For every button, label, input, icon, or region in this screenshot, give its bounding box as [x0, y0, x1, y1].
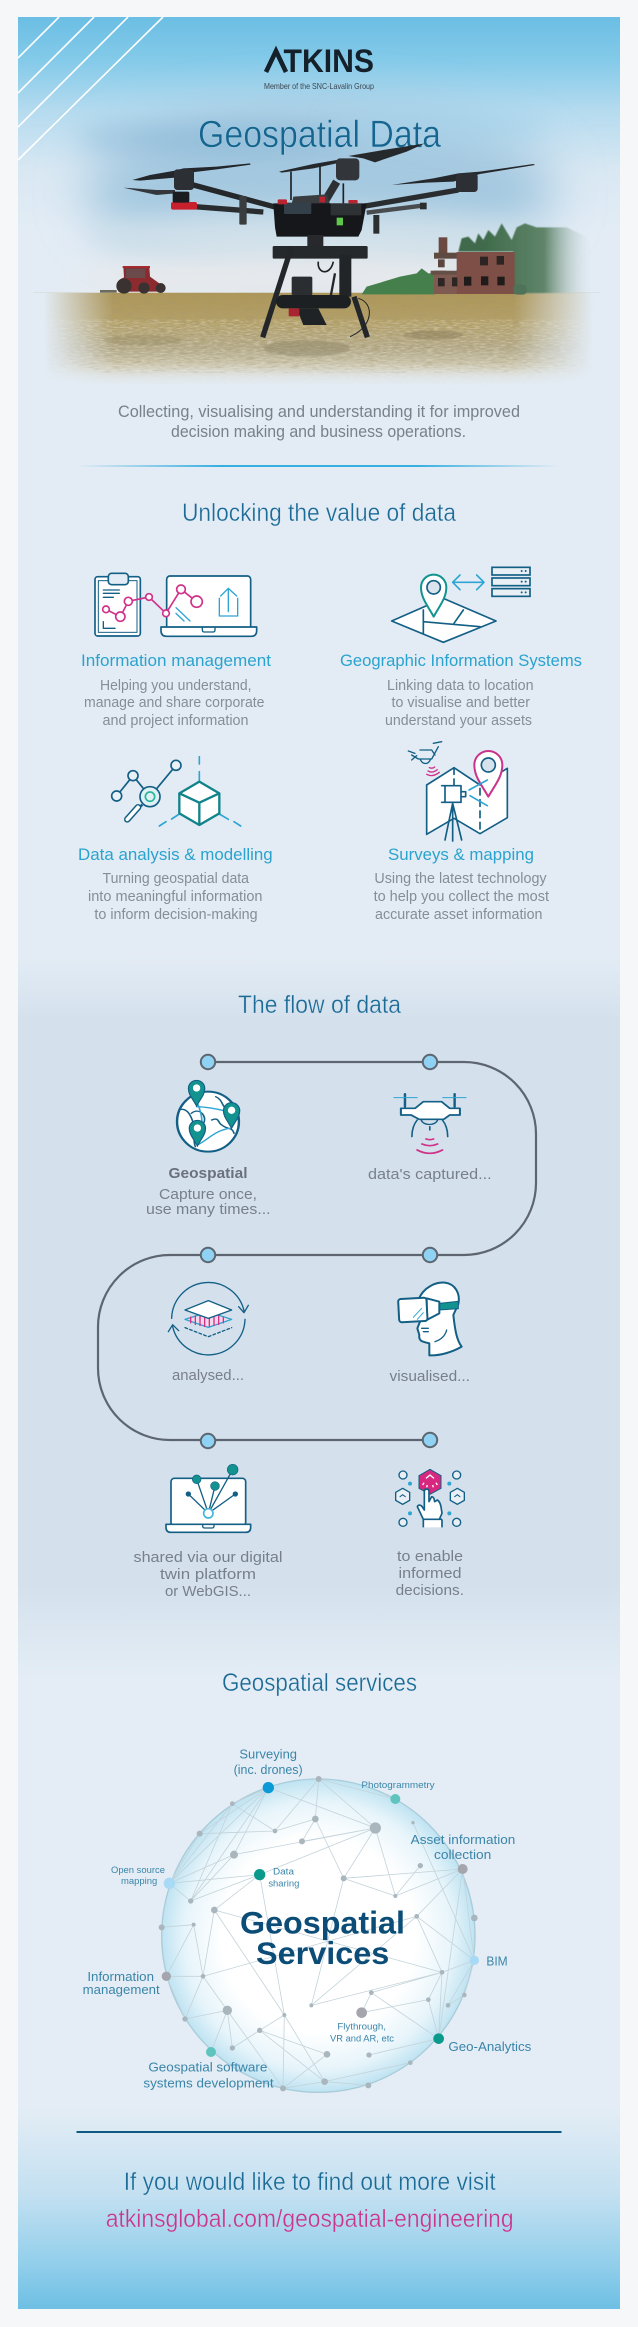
- trees: [458, 223, 597, 293]
- sphere labels: Photogrammetry: [361, 1780, 435, 1790]
- text block: geographic information systems: to visualise and better: [392, 695, 530, 711]
- text block: geographic information systems: understand your assets: [385, 713, 532, 729]
- text block: information management: Helping you understand,: [100, 678, 252, 694]
- text block: shared via digital twin: or WebGIS...: [165, 1584, 251, 1600]
- call to action: atkinsglobal.com/geospatial-engineering: [106, 2205, 514, 2233]
- text block: geospatial capture once: Capture once,: [159, 1187, 257, 1203]
- text block: surveys and mapping: Surveys & mapping: [388, 846, 534, 864]
- text block: information management: manage and share corporate: [84, 695, 264, 711]
- network nodes: [159, 1776, 478, 2091]
- sphere labels: management: [83, 1983, 160, 1997]
- icon: map pin and server: [392, 567, 530, 642]
- text: visualised: visualised...: [390, 1369, 470, 1385]
- hero sky clouds: [70, 105, 570, 304]
- sphere labels: mapping: [121, 1876, 157, 1886]
- ruined building: [431, 237, 527, 295]
- sphere labels: Surveying: [239, 1747, 297, 1761]
- call to action: [106, 2168, 514, 2233]
- text block: information management: and project information: [102, 713, 248, 729]
- sphere labels: sharing: [268, 1879, 299, 1889]
- text block: surveys and mapping: Using the latest technology: [374, 871, 547, 887]
- text block: geospatial capture once: [146, 1165, 271, 1218]
- flow path: [98, 1062, 536, 1440]
- sphere labels: Flythrough,: [337, 2021, 386, 2031]
- icon: surveys and mapping: [408, 742, 507, 841]
- field: [33, 292, 600, 381]
- drone: [123, 143, 535, 337]
- icon: VR headset head: [398, 1283, 462, 1355]
- tractor: [100, 266, 166, 294]
- sphere labels: [83, 1747, 531, 2091]
- call to action: If you would like to find out more visit: [124, 2168, 496, 2196]
- icon: laptop network: [166, 1464, 251, 1532]
- text block: geospatial capture once: Geospatial: [168, 1165, 248, 1182]
- sphere labels: Geospatial software: [148, 2061, 267, 2075]
- intro text: decision making and business operations.: [171, 423, 466, 441]
- sphere labels: Data: [273, 1867, 294, 1877]
- text block: shared via digital twin: twin platform: [160, 1567, 256, 1583]
- section: unlocking the value of data: [78, 499, 582, 923]
- hero photo: drone in field: [30, 143, 603, 393]
- sphere labels: Information: [87, 1970, 154, 1984]
- struts: [291, 166, 343, 203]
- body: [292, 194, 330, 204]
- icon: analysis cycle: [168, 1282, 248, 1355]
- text: data's captured: data's captured...: [368, 1167, 492, 1183]
- camera: [292, 277, 312, 295]
- section: geospatial services: [83, 1669, 531, 2092]
- intro text: Collecting, visualising and understanding it for improved: [118, 403, 520, 421]
- sphere labels: collection: [434, 1848, 491, 1862]
- text: analysed: analysed...: [172, 1368, 244, 1384]
- logo: Atkins: Member of the SNC-Lavalin Group: [264, 81, 374, 91]
- gimbal & bar: [307, 235, 323, 248]
- text block: data analysis and modelling: to inform decision-making: [94, 907, 258, 923]
- icon: survey drone: [394, 1094, 466, 1153]
- text block: to enable informed decisions: [396, 1549, 464, 1599]
- icon: data analysis and cube: [112, 757, 241, 826]
- text block: geospatial capture once: use many times...: [146, 1202, 271, 1218]
- heading: Unlocking the value of data: [182, 499, 456, 527]
- highlighted nodes: [162, 1782, 479, 2057]
- sphere labels: Open source: [111, 1865, 165, 1875]
- sphere labels: systems development: [143, 2077, 274, 2091]
- flow nodes: [201, 1055, 437, 1448]
- text block: shared via digital twin: shared via our digital: [134, 1550, 282, 1566]
- heading: The flow of data: [238, 991, 401, 1019]
- arms: [193, 185, 280, 208]
- text block: surveys and mapping: [374, 846, 549, 923]
- bushes: [362, 268, 435, 294]
- sphere labels: Asset information: [411, 1833, 515, 1847]
- section: the flow of data: [98, 991, 536, 1600]
- text block: data analysis and modelling: Turning geospatial data: [102, 871, 250, 887]
- sphere labels: Geo-Analytics: [448, 2040, 531, 2054]
- sphere title: [240, 1905, 405, 1971]
- text block: to enable informed decisions: to enable: [397, 1549, 463, 1565]
- intro text: [118, 403, 520, 441]
- landing legs: [263, 247, 292, 337]
- icon: hand pressing hexagon: [396, 1469, 464, 1527]
- sphere network diagram: [83, 1747, 531, 2092]
- icon: globe with pins: [177, 1080, 240, 1152]
- text block: surveys and mapping: to help you collect the most: [374, 889, 549, 905]
- text block: information management: Information management: [81, 652, 271, 670]
- text block: data analysis and modelling: Data analysis & modelling: [78, 846, 273, 864]
- sphere labels: VR and AR, etc: [330, 2034, 395, 2044]
- sphere labels: (inc. drones): [234, 1763, 303, 1777]
- corner stripes: [18, 17, 163, 160]
- text block: geographic information systems: Linking data to location: [387, 678, 534, 694]
- text block: shared via digital twin: [134, 1550, 282, 1600]
- sphere title: Services: [256, 1936, 389, 1971]
- text block: to enable informed decisions: informed: [398, 1566, 462, 1582]
- text block: data analysis and modelling: [78, 846, 273, 923]
- icon: clipboard and laptop: [95, 573, 257, 636]
- text block: surveys and mapping: accurate asset information: [375, 907, 542, 923]
- sphere title: Geospatial: [240, 1905, 405, 1940]
- text block: information management: [81, 652, 271, 729]
- propellers: [132, 163, 251, 181]
- sphere labels: BIM: [486, 1954, 508, 1968]
- title: Geospatial Data: [198, 114, 442, 156]
- text block: geographic information systems: [340, 652, 582, 729]
- heading: Geospatial services: [222, 1669, 417, 1697]
- text block: geographic information systems: Geographic Information Systems: [340, 652, 582, 670]
- text block: data analysis and modelling: into meaningful information: [88, 889, 262, 905]
- text block: to enable informed decisions: decisions.: [396, 1583, 464, 1599]
- motors: [174, 169, 194, 190]
